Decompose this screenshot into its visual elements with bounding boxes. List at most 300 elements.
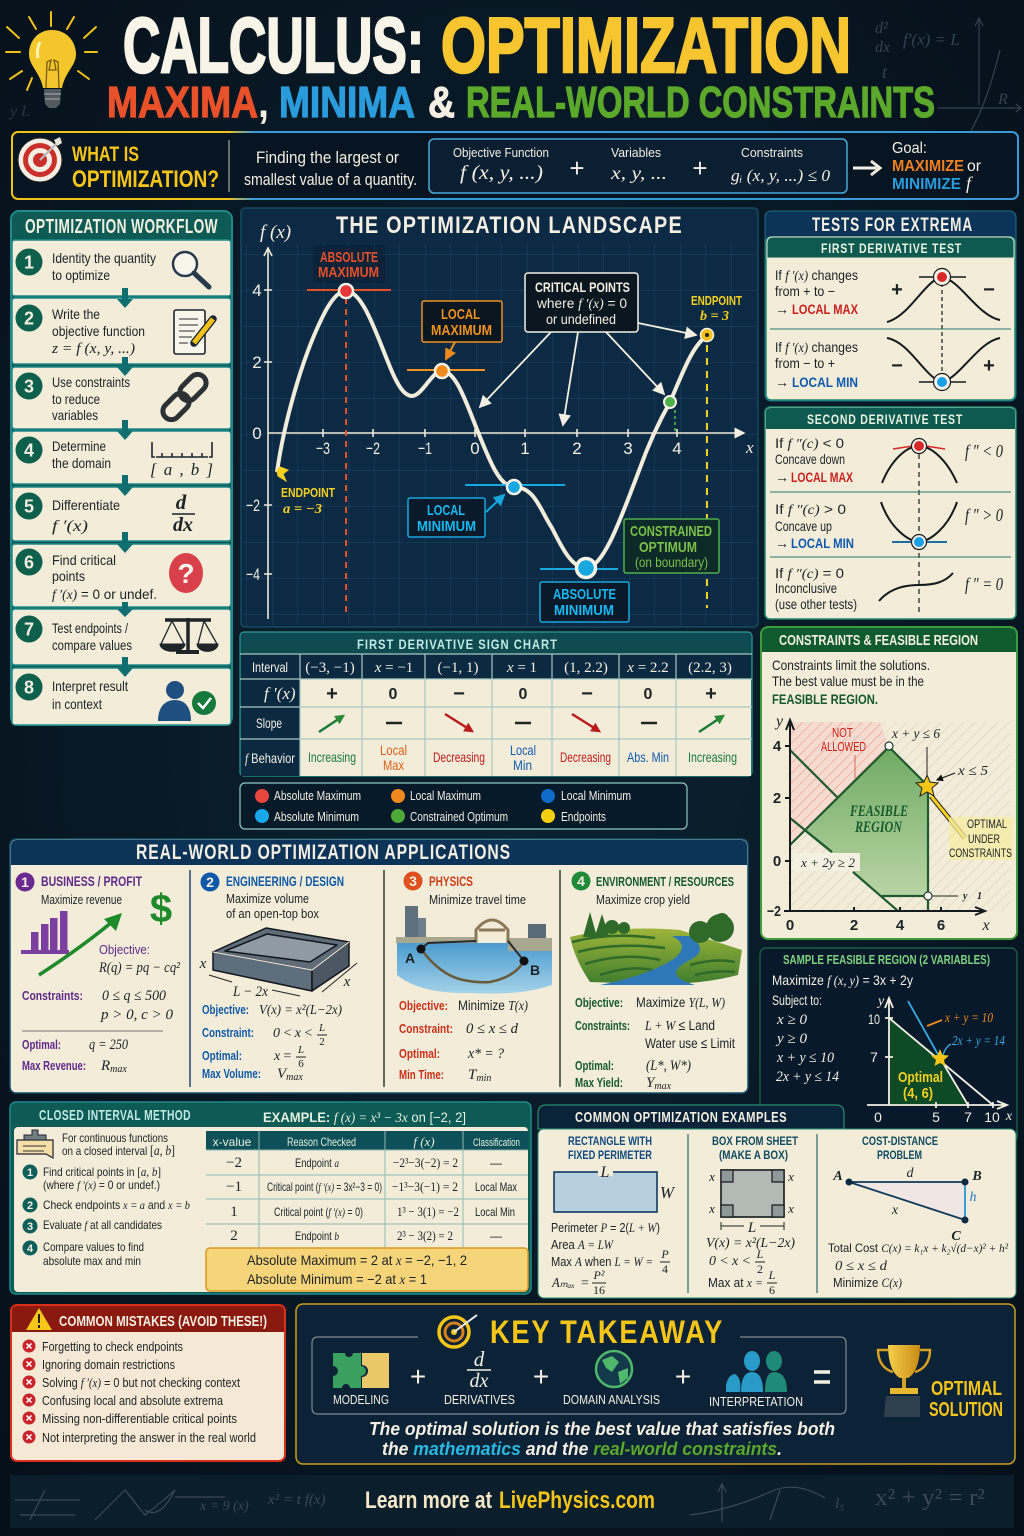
row: intervals: x = −1 bbox=[374, 660, 413, 676]
row: behavior: Increasing bbox=[308, 749, 356, 765]
text: method steps: Evaluate f at all candidates bbox=[43, 1218, 162, 1232]
point: absolute minimum bbox=[576, 558, 596, 578]
application: environment: Y bbox=[646, 1075, 654, 1091]
example: cost-distance: 0 ≤ x ≤ d bbox=[835, 1259, 888, 1274]
footer band bbox=[10, 1475, 1014, 1528]
icon: scales bbox=[160, 618, 218, 652]
decorative footer math bbox=[15, 1484, 825, 1522]
chart: feasible region: 4 bbox=[896, 917, 905, 934]
panel: key takeaway: + bbox=[410, 1361, 426, 1392]
application: engineering: L bbox=[297, 1044, 304, 1056]
application: environment: Objective: bbox=[575, 995, 623, 1010]
panel: objective formula: + bbox=[569, 153, 585, 183]
legend: Local Maximum bbox=[410, 788, 481, 803]
step texts: Test endpoints / bbox=[52, 620, 128, 636]
legend: Local Minimum bbox=[561, 788, 631, 803]
step texts: objective function bbox=[52, 323, 145, 339]
row: behavior: Local bbox=[510, 742, 536, 758]
panel: key takeaway bbox=[296, 1304, 1015, 1464]
example: box from sheet: 6 bbox=[769, 1283, 775, 1297]
label: local maximum bbox=[422, 301, 502, 342]
callout: critical points: CRITICAL POINTS bbox=[535, 279, 630, 295]
callout: absolute extrema result: Absolute Maximum = 2 at x = −2, −1, 2 bbox=[247, 1252, 467, 1269]
icon: question mark: ? bbox=[177, 558, 195, 589]
icon: domain globe bbox=[563, 1351, 660, 1407]
label: endpoint a bbox=[281, 485, 335, 517]
row: intervals: Interval bbox=[252, 659, 288, 675]
application: business: Max Revenue: bbox=[22, 1058, 86, 1073]
callout: absolute extrema result bbox=[206, 1248, 528, 1291]
text: takeaway statement: The optimal solution is the best value that satisfies both bbox=[369, 1419, 835, 1439]
step texts: Determine bbox=[52, 438, 106, 454]
step texts: to optimize bbox=[52, 267, 110, 283]
example: rectangle: Aₘₐₓ bbox=[551, 1276, 575, 1291]
callout: critical points bbox=[525, 273, 638, 332]
icon: target bbox=[439, 1315, 477, 1347]
example: cost-distance: d bbox=[906, 1166, 914, 1181]
axis labels: 4 bbox=[252, 281, 262, 300]
application: physics bbox=[396, 872, 552, 1084]
chart: sample region: Optimal bbox=[898, 1069, 943, 1086]
step numbers: 3 bbox=[24, 376, 34, 396]
icon: trophy bbox=[878, 1345, 930, 1417]
step texts: the domain bbox=[52, 455, 111, 471]
legend: Absolute Minimum bbox=[274, 809, 359, 824]
icon: magnifier bbox=[173, 252, 209, 287]
heading: closed interval: CLOSED INTERVAL METHOD bbox=[39, 1107, 191, 1124]
legend: Constrained Optimum bbox=[410, 809, 508, 824]
icon: clipboard bbox=[17, 1130, 53, 1158]
illustration: farm and river bbox=[570, 912, 742, 985]
application: engineering: V bbox=[277, 1066, 286, 1082]
label: local minimum: LOCAL bbox=[427, 502, 465, 519]
row: behavior: Decreasing bbox=[433, 749, 485, 765]
chart: bars bbox=[21, 911, 69, 954]
icon: warning bbox=[26, 1308, 52, 1330]
row: behavior: Increasing bbox=[688, 749, 737, 765]
panel: second derivative test: f ″ > 0 bbox=[965, 505, 1003, 525]
chart: inflection bbox=[879, 573, 953, 601]
text: method steps: (where f ′(x) = 0 or undef.) bbox=[43, 1178, 160, 1192]
point: absolute maximum bbox=[339, 284, 353, 298]
axis labels: 2 bbox=[572, 439, 582, 458]
text: concave up: LOCAL MIN bbox=[791, 535, 854, 551]
dashed guide lines bbox=[346, 298, 707, 612]
text: concave up: → bbox=[775, 535, 789, 551]
row: behavior bbox=[245, 742, 737, 773]
step texts: Find critical bbox=[52, 552, 116, 568]
chart: feasible region: REGION bbox=[854, 819, 903, 836]
label: absolute minimum: MINIMUM bbox=[554, 602, 614, 619]
text: linear program: 2x + y ≤ 14 bbox=[776, 1069, 839, 1085]
footer band: l₅ bbox=[835, 1496, 844, 1512]
icon: target bbox=[18, 137, 62, 182]
heading: workflow: OPTIMIZATION WORKFLOW bbox=[25, 216, 218, 238]
row: derivative signs: 0 bbox=[519, 686, 528, 703]
point: endpoint b bbox=[700, 328, 714, 342]
text: concave down bbox=[775, 435, 853, 485]
example: box from sheet: 0 < x < bbox=[709, 1254, 751, 1269]
example: cost-distance: C bbox=[951, 1229, 961, 1244]
chart: feasible region: 0 bbox=[773, 853, 781, 870]
row: intervals: (−1, 1) bbox=[438, 660, 478, 676]
example: box from sheet: L bbox=[747, 1220, 756, 1236]
chart: feasible region: y bbox=[774, 713, 784, 730]
application: business: Objective: bbox=[99, 942, 150, 957]
icon: domain bracket: [ a , b ] bbox=[150, 460, 213, 479]
application: physics: min bbox=[476, 1073, 491, 1084]
text: takeaway statement: the mathematics and the real-world constraints. bbox=[382, 1439, 782, 1459]
label: constrained optimum: (on boundary) bbox=[635, 554, 708, 570]
application: physics: Objective: bbox=[399, 998, 448, 1013]
text: local min rule: If f ′(x) changes bbox=[775, 339, 858, 356]
label: optimal under constraints: UNDER bbox=[968, 832, 1000, 846]
panel: objective formula: f (x, y, ...) bbox=[460, 162, 543, 184]
row: derivative signs: 0 bbox=[644, 686, 653, 703]
function curve bbox=[277, 291, 708, 568]
label: absolute maximum bbox=[313, 245, 385, 283]
application: business: q = 250 bbox=[89, 1037, 128, 1053]
chart: local max curve bbox=[887, 268, 1000, 380]
subtitle: & bbox=[428, 78, 455, 127]
text: inconclusive bbox=[775, 565, 857, 612]
decorative faint math, top right: d² bbox=[875, 20, 889, 37]
footer text: Learn more at bbox=[365, 1487, 492, 1514]
step texts: Interpret result bbox=[52, 678, 128, 694]
application: engineering: 2 bbox=[319, 1036, 325, 1048]
icon: derivatives bbox=[444, 1347, 515, 1407]
text: goal bbox=[892, 140, 982, 193]
panel: common optimization examples bbox=[538, 1105, 1016, 1298]
chart: feasible region: −2 bbox=[767, 903, 781, 920]
footer text: LivePhysics.com bbox=[499, 1487, 655, 1514]
callout: critical points: or undefined bbox=[546, 311, 616, 327]
panel: second derivative test: f ″ = 0 bbox=[965, 574, 1003, 594]
equals sign bbox=[814, 1372, 830, 1382]
axis labels: −2 bbox=[366, 439, 380, 458]
icon: light bulb bbox=[6, 12, 97, 108]
application: environment: (L*, W*) bbox=[646, 1058, 691, 1074]
application: physics: Minimize T(x) bbox=[458, 997, 528, 1014]
example: box from sheet: BOX FROM SHEET bbox=[712, 1134, 799, 1148]
application: engineering: of an open-top box bbox=[226, 906, 319, 921]
panel: optimization landscape chart bbox=[241, 208, 758, 627]
chart: concave up bbox=[881, 502, 957, 550]
label: constrained optimum bbox=[624, 519, 719, 573]
axis labels: 3 bbox=[623, 439, 633, 458]
example: rectangle: P bbox=[660, 1247, 669, 1261]
icon: person with check bbox=[158, 681, 216, 721]
text: concave down: Concave down bbox=[775, 451, 845, 467]
text: local max rule: from + to − bbox=[775, 283, 835, 299]
heading: what is optimization: WHAT IS bbox=[72, 143, 139, 166]
label: local minimum bbox=[408, 498, 485, 537]
example: cost-distance: A bbox=[832, 1169, 843, 1184]
step texts: f ′(x) = 0 or undef. bbox=[52, 586, 157, 603]
label: endpoint a: ENDPOINT bbox=[281, 485, 335, 500]
icon: chain bbox=[159, 371, 210, 423]
icon: question mark bbox=[169, 553, 203, 593]
row: derivative signs: f ′(x) bbox=[264, 684, 296, 703]
list of mistakes: Solving f ′(x) = 0 but not checking context bbox=[42, 1375, 240, 1390]
step texts: Use constraints bbox=[52, 374, 130, 390]
heading: second derivative: SECOND DERIVATIVE TEST bbox=[807, 411, 963, 427]
text: goal: or bbox=[967, 158, 982, 175]
text: linear program: x + y ≤ 10 bbox=[776, 1050, 834, 1066]
label: endpoint b: ENDPOINT bbox=[691, 293, 742, 308]
step numbers bbox=[16, 248, 42, 700]
heading: landscape: THE OPTIMIZATION LANDSCAPE bbox=[336, 212, 683, 239]
chart: sample region: 10 bbox=[984, 1109, 1000, 1125]
example: box from sheet: (MAKE A BOX) bbox=[719, 1148, 788, 1162]
example: cost-distance: Minimize C(x) bbox=[833, 1275, 902, 1290]
chart: concave down bbox=[882, 438, 957, 612]
application: engineering: L bbox=[318, 1022, 325, 1034]
application: environment: max bbox=[654, 1081, 672, 1092]
label: constrained optimum: OPTIMUM bbox=[639, 539, 697, 556]
table: example evaluation bbox=[206, 1131, 528, 1248]
text: concave down: LOCAL MAX bbox=[791, 469, 853, 485]
panel: first derivative sign chart bbox=[240, 632, 752, 776]
table: example evaluation: Classification bbox=[473, 1137, 520, 1149]
example: cost-distance: h bbox=[970, 1190, 976, 1205]
row: intervals: x = 2.2 bbox=[626, 660, 669, 676]
application: environment: Maximize Y(L, W) bbox=[636, 994, 725, 1011]
chart: feasible region: 6 bbox=[937, 917, 945, 934]
decorative faint math, top right: R bbox=[997, 91, 1008, 108]
row: intervals: (2.2, 3) bbox=[688, 660, 732, 676]
point: local maximum bbox=[435, 364, 449, 378]
text: method steps: absolute max and min bbox=[43, 1254, 141, 1268]
chart: local min curve bbox=[887, 338, 1000, 390]
chart: feasible region: x ≤ 5 bbox=[957, 764, 988, 779]
panel: tests for extrema bbox=[765, 211, 1016, 401]
application: engineering: 6 bbox=[298, 1058, 304, 1070]
heading: applications: REAL-WORLD OPTIMIZATION APPLICATIONS bbox=[136, 841, 511, 864]
illustration: river crossing: B bbox=[530, 962, 540, 978]
list of mistakes: Confusing local and absolute extrema bbox=[42, 1393, 224, 1408]
callout: absolute extrema result: Absolute Minimum = −2 at x = 1 bbox=[247, 1271, 427, 1288]
title bbox=[123, 1, 851, 89]
icon: interpretation people: INTERPRETATION bbox=[709, 1394, 803, 1409]
icon: document and pencil bbox=[174, 310, 213, 354]
icon: domain bracket bbox=[150, 442, 213, 479]
icon: d/dx: d bbox=[176, 490, 187, 514]
chart: feasible region: x + y ≤ 6 bbox=[891, 727, 940, 742]
step numbers: 1 bbox=[24, 252, 34, 272]
application: environment: Water use ≤ Limit bbox=[645, 1035, 735, 1051]
text: local max rule: LOCAL MAX bbox=[792, 301, 859, 317]
table: example evaluation: x-value bbox=[213, 1135, 252, 1149]
panel: objective formula: Constraints bbox=[741, 145, 803, 160]
footer band: x² + y² = r² bbox=[875, 1485, 985, 1511]
text: linear program bbox=[772, 972, 913, 1085]
heading: key takeaway: KEY TAKEAWAY bbox=[490, 1314, 724, 1350]
table: example evaluation: Local Min bbox=[475, 1205, 515, 1219]
text: inconclusive: Inconclusive bbox=[775, 580, 837, 596]
row: behavior: Local bbox=[380, 742, 407, 758]
footer band: x = 9 (x) bbox=[199, 1499, 249, 1514]
panel: what is optimization banner bbox=[12, 132, 1018, 199]
example: rectangle: RECTANGLE WITH bbox=[568, 1134, 652, 1148]
example: box from sheet: L bbox=[756, 1247, 764, 1261]
example: cost-distance: Total Cost C(x) = k₁x + k₂√(d−x)² + h² bbox=[828, 1241, 1008, 1255]
heading: common examples: COMMON OPTIMIZATION EXAMPLES bbox=[575, 1109, 787, 1126]
application: physics: Constraint: bbox=[399, 1021, 453, 1036]
example: rectangle: Perimeter P = 2(L + W) bbox=[551, 1220, 660, 1235]
step texts: Differentiate bbox=[52, 497, 120, 513]
table: example evaluation: 1 bbox=[230, 1204, 238, 1220]
example: rectangle: 4 bbox=[662, 1262, 668, 1276]
icon: derivatives: d bbox=[474, 1347, 485, 1371]
text: concave up bbox=[775, 501, 854, 551]
axis labels: −4 bbox=[246, 565, 260, 584]
subtitle: , bbox=[258, 78, 269, 127]
application: engineering: ENGINEERING / DESIGN bbox=[226, 873, 344, 889]
icon: open-top box bbox=[213, 928, 349, 991]
row: behavior: Abs. Min bbox=[627, 749, 669, 765]
row: derivative signs: + bbox=[326, 683, 338, 705]
text: local max rule bbox=[775, 267, 859, 317]
panel: objective formula: Variables bbox=[611, 145, 661, 160]
application: environment: Maximize crop yield bbox=[596, 892, 690, 907]
point: local minimum bbox=[507, 480, 521, 494]
text: goal: f bbox=[966, 173, 974, 193]
heading: first derivative: FIRST DERIVATIVE TEST bbox=[821, 240, 962, 256]
text: method steps: Find critical points in [a, b] bbox=[43, 1164, 161, 1179]
application: physics: 0 ≤ x ≤ d bbox=[466, 1021, 518, 1037]
example: rectangle: L bbox=[600, 1164, 610, 1181]
chart: feasible region: NOT bbox=[832, 725, 853, 740]
application: environment: L + W ≤ Land bbox=[644, 1017, 715, 1034]
arrow: optimal point pointer bbox=[931, 796, 965, 838]
legend: Absolute Maximum bbox=[274, 788, 361, 803]
text: definition: Finding the largest or bbox=[256, 148, 399, 167]
example: cost-distance: PROBLEM bbox=[877, 1148, 922, 1162]
point: endpoint a bbox=[277, 467, 288, 481]
example: rectangle: = bbox=[581, 1276, 589, 1291]
application: business: R(q) = pq − cq² bbox=[98, 960, 180, 976]
row: derivative signs: − bbox=[581, 683, 593, 705]
table: example evaluation: — bbox=[490, 1229, 502, 1243]
decorative faint math, top right: f′(x) = L bbox=[903, 30, 960, 49]
step numbers: 4 bbox=[24, 440, 34, 460]
table: example evaluation: 2³ − 3(2) = 2 bbox=[397, 1228, 453, 1243]
callout: critical points: where f ′(x) = 0 bbox=[536, 295, 627, 312]
arrow: to local minimum bbox=[486, 495, 504, 512]
application: physics: Min Time: bbox=[399, 1067, 444, 1082]
chart: sample region bbox=[867, 994, 1013, 1125]
chart: sample region: 2x + y = 14 bbox=[952, 1034, 1005, 1049]
subtitle: MAXIMA bbox=[107, 78, 258, 127]
text: goal: MAXIMIZE bbox=[892, 158, 964, 175]
text: method steps: 4 bbox=[27, 1243, 34, 1255]
icon: modeling puzzle: MODELING bbox=[333, 1392, 389, 1407]
application: engineering: Optimal: bbox=[202, 1048, 242, 1063]
chart: feasible region: ALLOWED bbox=[821, 739, 866, 754]
list of mistakes bbox=[22, 1339, 256, 1445]
axis labels: 0 bbox=[252, 424, 262, 443]
step numbers: 8 bbox=[24, 678, 34, 698]
row: derivative signs: + bbox=[705, 683, 717, 705]
panel: second derivative test: f ″ < 0 bbox=[965, 441, 1003, 461]
application: engineering: x = bbox=[273, 1049, 292, 1064]
label: absolute minimum bbox=[540, 582, 629, 622]
text: inconclusive: (use other tests) bbox=[775, 596, 857, 612]
text: concave down: → bbox=[775, 469, 789, 485]
text: constraints description bbox=[772, 657, 930, 707]
text: constraints description: Constraints limit the solutions. bbox=[772, 657, 930, 673]
chart axes bbox=[264, 248, 744, 619]
panel: constraints and feasible region bbox=[761, 627, 1017, 939]
step texts: compare values bbox=[52, 637, 132, 653]
table: example evaluation: −1 bbox=[226, 1179, 242, 1195]
heading: common mistakes: COMMON MISTAKES (AVOID THESE!) bbox=[59, 1313, 267, 1330]
tangent lines bbox=[307, 290, 618, 569]
chart: feasible region: 0 bbox=[786, 917, 794, 934]
step texts: z = f (x, y, ...) bbox=[51, 341, 135, 357]
axis labels: x bbox=[745, 438, 754, 457]
text: method steps: 1 bbox=[27, 1167, 33, 1179]
text: inconclusive: If f ″(c) = 0 bbox=[775, 565, 844, 582]
step texts: f ′(x) bbox=[52, 518, 88, 535]
application: engineering: Maximize volume bbox=[226, 891, 309, 906]
row: behavior: Max bbox=[383, 757, 404, 773]
example: rectangle: FIXED PERIMETER bbox=[568, 1148, 652, 1162]
row: behavior: f Behavior bbox=[245, 750, 295, 767]
application: engineering: 2 bbox=[206, 874, 214, 890]
example: rectangle: Area A = LW bbox=[551, 1237, 614, 1252]
text: linear program: x ≥ 0 bbox=[776, 1012, 808, 1028]
label: local maximum: MAXIMUM bbox=[431, 322, 492, 339]
label: absolute maximum: ABSOLUTE bbox=[320, 249, 378, 266]
text: local max rule: → bbox=[775, 301, 789, 317]
application: engineering: x bbox=[343, 974, 351, 990]
step numbers: 2 bbox=[24, 308, 34, 328]
panel: optimization workflow bbox=[11, 211, 232, 725]
chart: feasible region: 2 bbox=[850, 917, 858, 934]
row: intervals bbox=[252, 659, 732, 676]
chart: sample region: 7 bbox=[964, 1109, 972, 1125]
text: local max rule: If f ′(x) changes bbox=[775, 267, 858, 284]
text: local min rule: from − to + bbox=[775, 355, 835, 371]
text: linear program: y ≥ 0 bbox=[775, 1031, 808, 1047]
application: environment: Constraints: bbox=[575, 1018, 630, 1033]
chart: sample region: y bbox=[876, 994, 885, 1009]
panel: common mistakes bbox=[11, 1305, 285, 1461]
chart: feasible region bbox=[767, 713, 1013, 934]
chart: feasible region: 2 bbox=[773, 790, 781, 807]
table: example evaluation: Endpoint b bbox=[295, 1229, 339, 1243]
text: takeaway statement bbox=[369, 1419, 835, 1459]
subtitle: MINIMA bbox=[279, 78, 415, 127]
table: example evaluation: −1³−3(−1) = 2 bbox=[392, 1179, 458, 1194]
step texts: Identity the quantity bbox=[52, 250, 156, 266]
text: concave up: Concave up bbox=[775, 518, 832, 534]
row: slope arrows: Slope bbox=[256, 715, 282, 731]
axis labels: f (x) bbox=[260, 222, 291, 243]
illustration: river crossing bbox=[396, 906, 552, 994]
label: optimal solution bbox=[929, 1378, 1003, 1421]
text: method steps: on a closed interval [a, b] bbox=[62, 1144, 175, 1159]
chart: feasible region: x bbox=[981, 917, 990, 934]
heading: what is optimization bbox=[72, 143, 219, 193]
label: constrained optimum: CONSTRAINED bbox=[630, 523, 712, 540]
panel: real-world applications bbox=[10, 839, 748, 1093]
icon: star optimal bbox=[916, 775, 938, 796]
icon: modeling puzzle bbox=[333, 1353, 389, 1407]
application: business: Optimal: bbox=[22, 1037, 61, 1052]
